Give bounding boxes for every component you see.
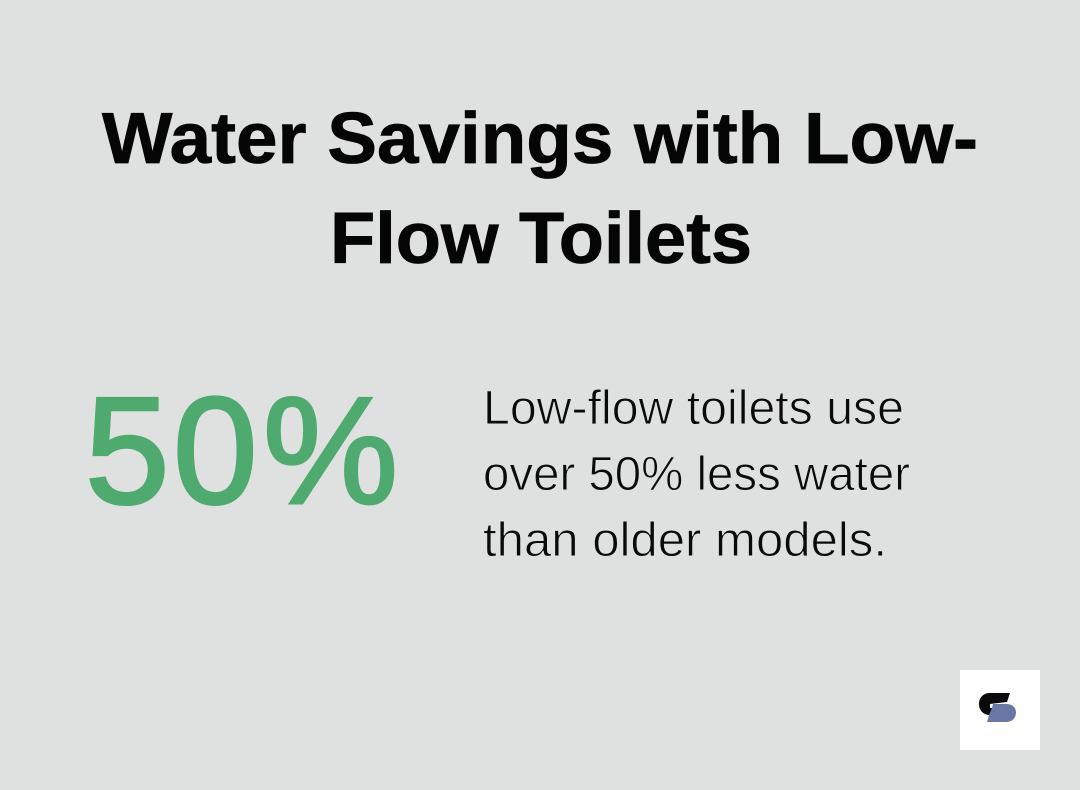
title: Water Savings with Low-: [102, 99, 978, 179]
logo mark: black upper S shape: [979, 693, 1010, 715]
title: [102, 99, 978, 279]
title: Flow Toilets: [330, 199, 752, 279]
description text: Low-flow toilets use: [483, 382, 904, 435]
logo mark: slate blue lower S shape: [987, 704, 1016, 722]
logo badge: [960, 670, 1040, 750]
description text: than older models.: [483, 514, 887, 567]
big statistic: 50%: 50%: [85, 366, 398, 536]
description text: [483, 382, 910, 567]
description text: over 50% less water: [483, 448, 910, 501]
